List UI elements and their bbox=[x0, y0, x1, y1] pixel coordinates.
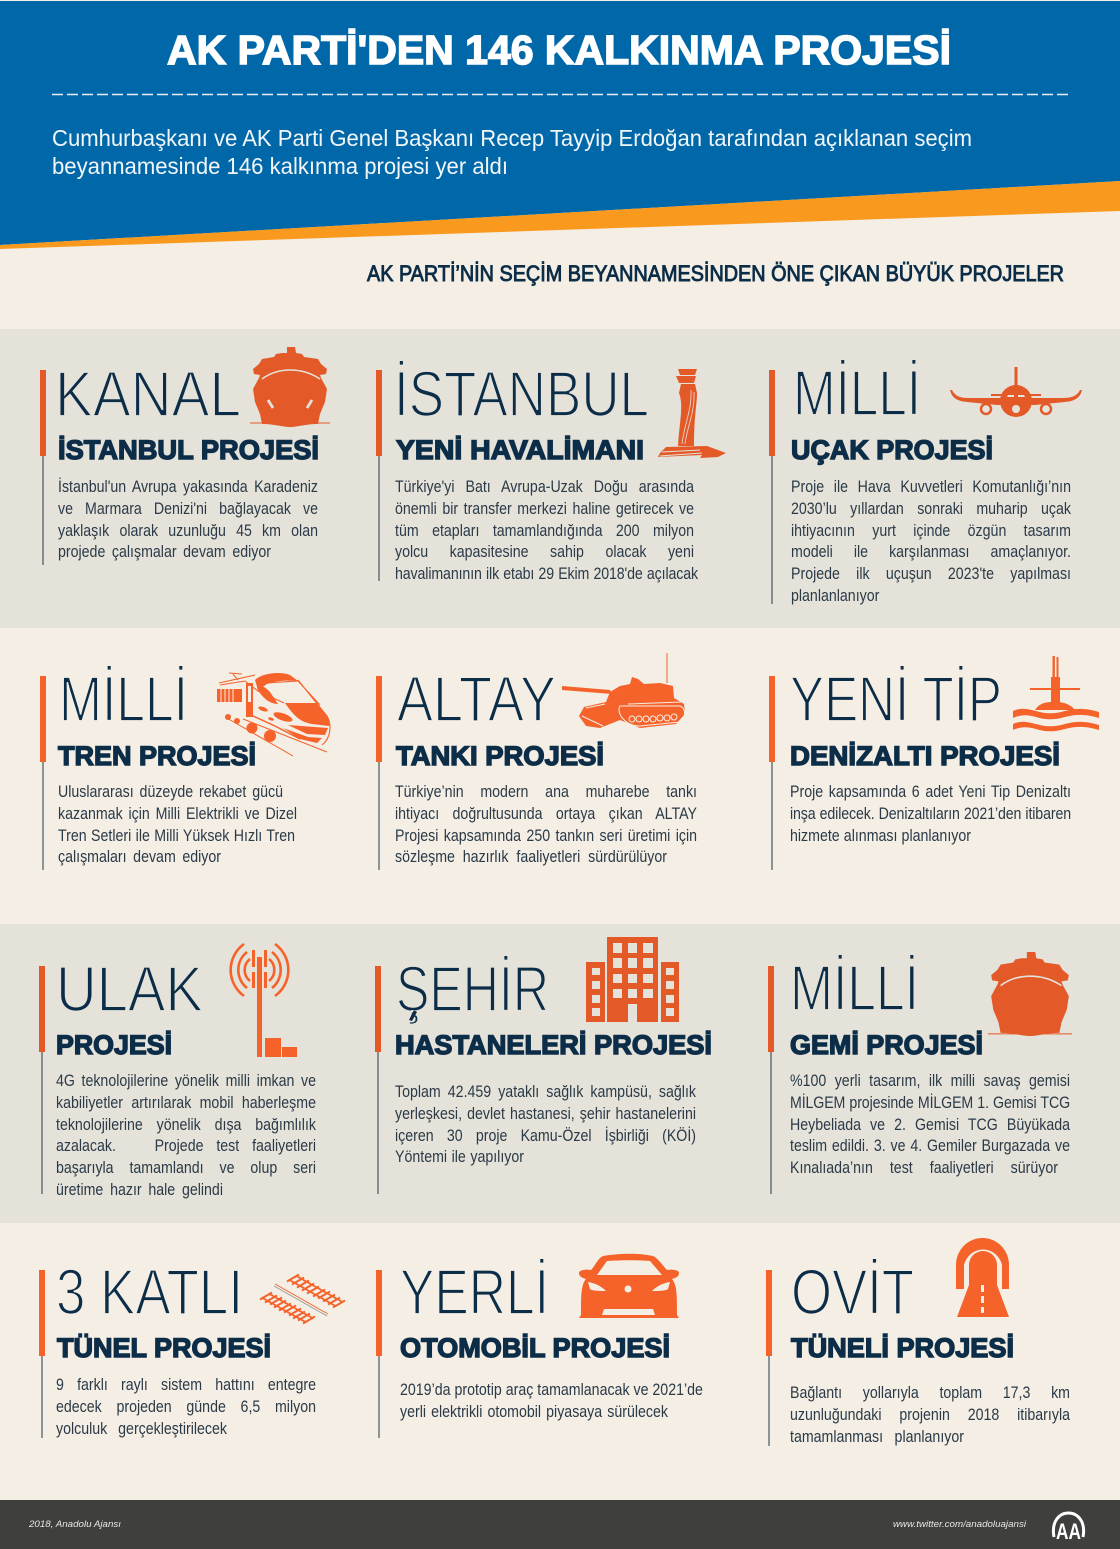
text block bbox=[790, 1069, 1072, 1179]
text block: içeren 30 proje Kamu-Özel İşbirliği (KÖİ) bbox=[395, 1127, 696, 1145]
text block: ihtiyacı doğrultusunda ortaya çıkan ALTAY bbox=[395, 805, 697, 823]
panel: Ulak bbox=[39, 944, 318, 1201]
text block bbox=[395, 1080, 700, 1170]
text block: Projesi kapsamında 250 tankın seri üretimi için bbox=[395, 827, 697, 845]
subheading: UÇAK PROJESİ bbox=[791, 435, 993, 465]
icon: ship bbox=[250, 347, 330, 427]
text block: Heybeliada ve 2. Gemisi TCG Büyükada bbox=[790, 1116, 1070, 1134]
subheading: TÜNELİ PROJESİ bbox=[791, 1333, 1014, 1363]
heading: Kanal: KANAL bbox=[55, 358, 241, 430]
text block: inşa edilecek. Denizaltıların 2021’den itibaren bbox=[790, 805, 1071, 823]
icon: rails bbox=[260, 1274, 345, 1324]
footer bbox=[0, 1500, 1120, 1549]
text block bbox=[56, 1069, 318, 1201]
text block: planlanlanıyor bbox=[791, 587, 879, 605]
icon: ship bbox=[988, 952, 1072, 1036]
text block: yerleşkesi, devlet hastanesi, şehir hastanelerini bbox=[395, 1105, 696, 1123]
text block: teslim edildi. 3. ve 4. Gemiler Burgazada ve bbox=[790, 1137, 1070, 1155]
text block bbox=[791, 475, 1073, 607]
text block: azalacak. Projede test faaliyetleri bbox=[56, 1137, 316, 1155]
icon: hospital bbox=[586, 937, 679, 1022]
text block: Proje kapsamında 6 adet Yeni Tip Denizaltı bbox=[790, 783, 1071, 801]
heading: Milli: MİLLİ bbox=[790, 952, 919, 1024]
subheading: TANKI PROJESİ bbox=[396, 741, 604, 771]
text block: Kınalıada’nın test faaliyetleri sürüyor bbox=[790, 1159, 1058, 1177]
text block: Yöntemi ile yapılıyor bbox=[395, 1148, 524, 1166]
panel: Milli Tren bbox=[40, 663, 330, 870]
panel: Yeni Tip Denizaltı bbox=[769, 656, 1099, 870]
panel: Kanal İstanbul bbox=[40, 347, 330, 565]
text block: modeli ile karşılanması amaçlanıyor. bbox=[791, 543, 1071, 561]
subheading: TREN PROJESİ bbox=[58, 741, 256, 771]
text block: yaklaşık olarak uzunluğu 45 km olan bbox=[58, 522, 318, 540]
text block: 2030’lu yıllardan sonraki muharip uçak bbox=[791, 500, 1071, 518]
text block: 4G teknolojilerine yönelik milli imkan ve bbox=[56, 1072, 316, 1090]
text block: tamamlanması planlanıyor bbox=[790, 1428, 964, 1446]
icon: antenna bbox=[231, 944, 297, 1057]
icon: plane bbox=[950, 367, 1082, 417]
panel: Şehir Hastaneleri bbox=[375, 937, 712, 1194]
text block: uzunluğundaki projenin 2018 itibarıyla bbox=[790, 1406, 1070, 1424]
heading: 3 Katlı: 3 KATLI bbox=[56, 1256, 243, 1328]
icon: train bbox=[217, 673, 330, 756]
text block: sözleşme hazırlık faaliyetleri sürdürülüyor bbox=[395, 848, 667, 866]
text block: çalışmaları devam ediyor bbox=[58, 848, 221, 866]
icon: tunnel bbox=[956, 1238, 1009, 1317]
subheading: YENİ HAVALİMANI bbox=[396, 435, 644, 465]
subtitle: Cumhurbaşkanı ve AK Parti Genel Başkanı Recep Tayyip Erdoğan tarafından açıklanan seçim bbox=[52, 125, 972, 151]
panel: Milli Uçak bbox=[769, 357, 1082, 607]
text block bbox=[790, 780, 1075, 850]
text block: Projede ilk uçuşun 2023'te yapılması bbox=[791, 565, 1071, 583]
heading: Milli: MİLLİ bbox=[793, 357, 921, 429]
text block: %100 yerli tasarım, ilk milli savaş gemisi bbox=[790, 1072, 1070, 1090]
heading: Milli: MİLLİ bbox=[59, 663, 188, 735]
panel: Milli Gemi bbox=[768, 952, 1072, 1194]
section heading: AK PARTİ’NİN SEÇİM BEYANNAMESİNDEN ÖNE ÇIKAN BÜYÜK PROJELER bbox=[367, 261, 1064, 286]
subheading: GEMİ PROJESİ bbox=[790, 1030, 983, 1060]
credit: 2018, Anadolu Ajansı bbox=[28, 1519, 121, 1530]
text block: Uluslararası düzeyde rekabet gücü bbox=[58, 783, 283, 801]
panel: İstanbul Yeni Havalimanı bbox=[376, 358, 726, 585]
social link: www.twitter.com/anadoluajansi bbox=[893, 1519, 1027, 1530]
subheading: DENİZALTI PROJESİ bbox=[790, 741, 1060, 771]
heading: Ovit: OVİT bbox=[791, 1256, 914, 1328]
text block: kazanmak için Milli Elektrikli ve Dizel bbox=[58, 805, 297, 823]
subheading: İSTANBUL PROJESİ bbox=[58, 435, 319, 465]
heading: Yeni Tip: YENİ TİP bbox=[790, 663, 1002, 735]
subtitle: beyannamesinde 146 kalkınma projesi yer aldı bbox=[52, 153, 508, 179]
panel: Yerli Otomobil bbox=[376, 1254, 706, 1438]
band: row 3 background bbox=[0, 924, 1120, 1223]
icon: AA logo bbox=[1053, 1513, 1084, 1544]
text block: tüm etapları tamamlandığında 200 milyon bbox=[395, 522, 694, 540]
text block: başarıyla tamamlandı ve olup seri bbox=[56, 1159, 316, 1177]
text block: Türkiye’nin modern ana muharebe tankı bbox=[395, 783, 697, 801]
text block: Proje ile Hava Kuvvetleri Komutanlığı’nın bbox=[791, 478, 1071, 496]
text block: projede çalışmalar devam ediyor bbox=[58, 543, 271, 561]
icon: AA logo: AA bbox=[1056, 1519, 1081, 1544]
text block bbox=[790, 1381, 1072, 1451]
text block bbox=[395, 475, 700, 585]
heading: Altay: ALTAY bbox=[397, 663, 556, 735]
text block: kabiliyetler artırılarak mobil haberleşme bbox=[56, 1094, 316, 1112]
text block: havalimanının ilk etabı 29 Ekim 2018'de açılacak bbox=[395, 565, 698, 583]
heading: Ulak: ULAK bbox=[56, 953, 203, 1025]
text block bbox=[56, 1373, 318, 1443]
text block: teknolojilerine yönelik dışa bağımlılık bbox=[56, 1116, 316, 1134]
text block: yolculuk gerçekleştirilecek bbox=[56, 1420, 227, 1438]
text block: Türkiye'yi Batı Avrupa-Uzak Doğu arasında bbox=[395, 478, 694, 496]
icon: submarine bbox=[1013, 656, 1099, 731]
text block: üretime hazır hale gelindi bbox=[56, 1181, 223, 1199]
text block bbox=[400, 1378, 706, 1424]
text block: yerli elektrikli otomobil piyasaya sürülecek bbox=[400, 1403, 668, 1421]
subtitle bbox=[52, 125, 972, 179]
heading: İstanbul: İSTANBUL bbox=[394, 358, 649, 430]
text block bbox=[58, 475, 320, 565]
text block: ihtiyacının yurt içinde özgün tasarım bbox=[791, 522, 1071, 540]
text block: MİLGEM projesinde MİLGEM 1. Gemisi TCG bbox=[790, 1094, 1070, 1112]
text block: ve Marmara Denizi'ni bağlayacak ve bbox=[58, 500, 318, 518]
text block bbox=[58, 780, 303, 870]
subheading: HASTANELERİ PROJESİ bbox=[395, 1030, 712, 1060]
subheading: TÜNEL PROJESİ bbox=[57, 1333, 271, 1363]
text block: yolcu kapasitesine sahip olacak yeni bbox=[395, 543, 694, 561]
subheading: PROJESİ bbox=[56, 1030, 172, 1060]
band: row 1 background bbox=[0, 329, 1120, 628]
text block: 9 farklı raylı sistem hattını entegre bbox=[56, 1376, 316, 1394]
header banner bbox=[0, 1, 1120, 249]
text block: Bağlantı yollarıyla toplam 17,3 km bbox=[790, 1384, 1070, 1402]
text block: 2019’da prototip araç tamamlanacak ve 2021’de bbox=[400, 1381, 703, 1399]
icon: car bbox=[579, 1254, 679, 1318]
icon: airport tower bbox=[658, 369, 726, 458]
heading: Şehir: ŞEHİR bbox=[396, 953, 549, 1025]
icon: tank bbox=[562, 653, 685, 728]
text block: İstanbul'un Avrupa yakasında Karadeniz bbox=[58, 478, 318, 496]
title: AK PARTİ'DEN 146 KALKINMA PROJESİ bbox=[167, 27, 951, 73]
text block bbox=[395, 780, 700, 870]
panel: 3 Katlı Tünel bbox=[39, 1256, 345, 1443]
text block: edecek projeden günde 6,5 milyon bbox=[56, 1398, 316, 1416]
text block: hizmete alınması planlanıyor bbox=[790, 827, 971, 845]
text block: Toplam 42.459 yataklı sağlık kampüsü, sağlık bbox=[395, 1083, 696, 1101]
text block: Tren Setleri ile Milli Yüksek Hızlı Tren bbox=[58, 827, 295, 845]
heading: Yerli: YERLİ bbox=[400, 1256, 549, 1328]
panel: Ovit Tüneli bbox=[766, 1238, 1072, 1451]
text block: önemli bir transfer merkezi haline getirecek ve bbox=[395, 500, 694, 518]
subheading: OTOMOBİL PROJESİ bbox=[400, 1333, 670, 1363]
panel: Altay Tankı bbox=[376, 653, 700, 870]
